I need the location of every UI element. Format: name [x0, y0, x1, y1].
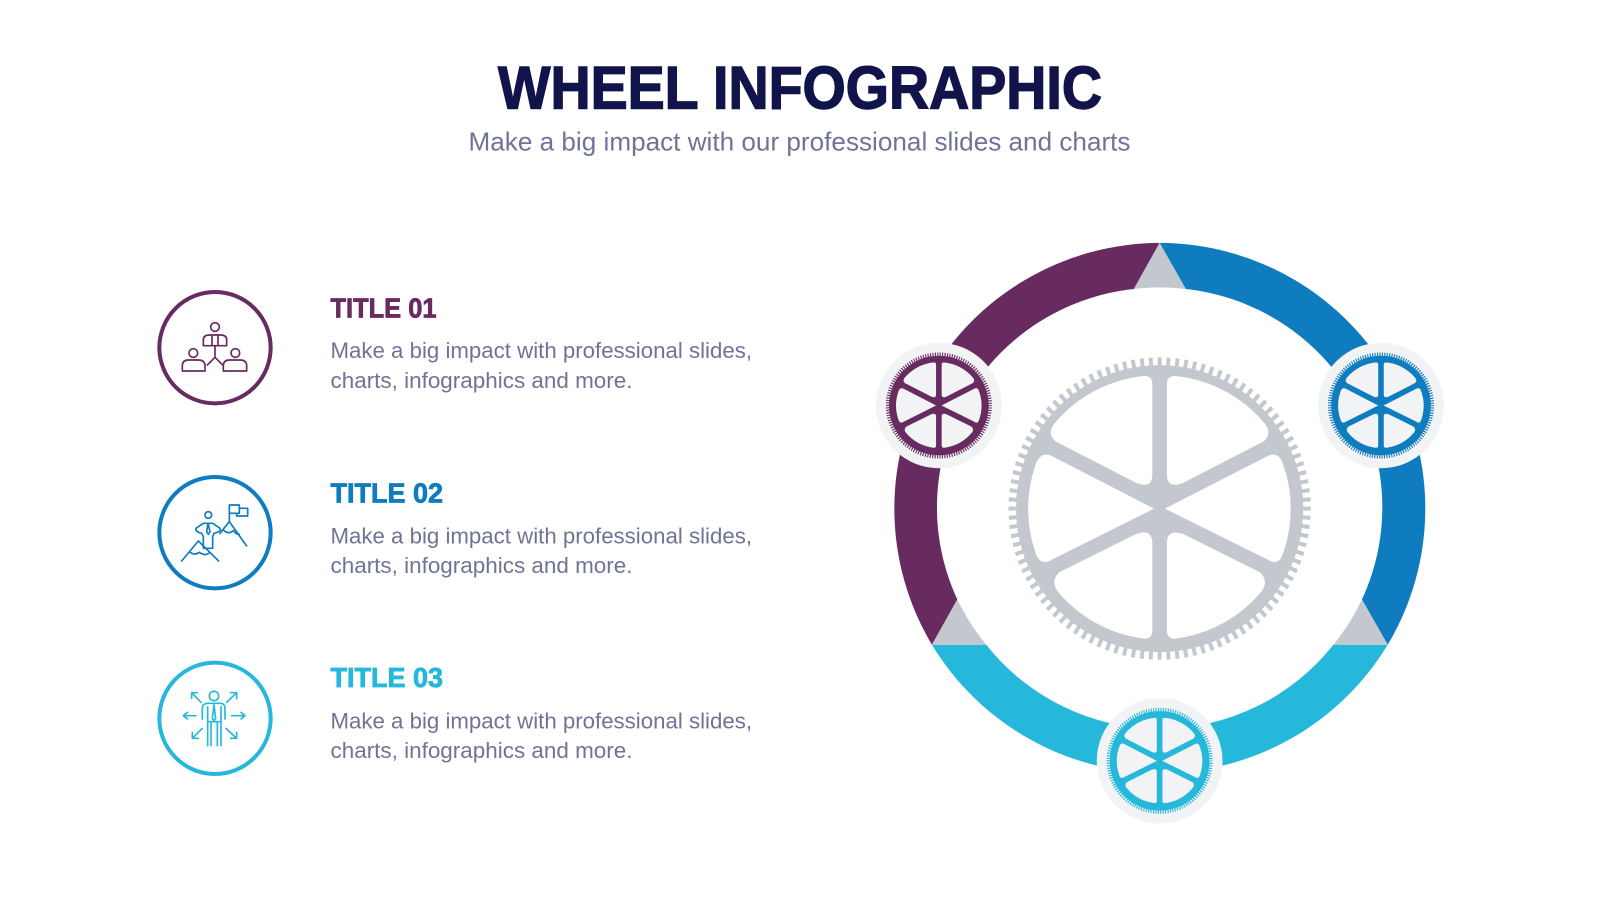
- ring segment: cyan: [932, 645, 1388, 773]
- title: WHEEL INFOGRAPHIC: [498, 54, 1102, 122]
- divider triangle: left: [932, 599, 986, 645]
- badge: blue gear: [1318, 343, 1444, 468]
- divider triangle: right: [1333, 599, 1388, 645]
- text block: description 02: charts, infographics and more.: [330, 553, 632, 578]
- heading: title 02: TITLE 02: [330, 478, 443, 508]
- panel: item 02: [159, 477, 752, 588]
- ring segment: purple: [894, 243, 1160, 645]
- icon: climber with flag: [159, 477, 271, 588]
- heading: title 03: TITLE 03: [330, 662, 443, 693]
- text block: description 02: Make a big impact with professional slides,: [330, 524, 752, 548]
- text block: description 03: Make a big impact with professional slides,: [330, 708, 752, 734]
- text block: description 01: Make a big impact with professional slides,: [330, 338, 752, 363]
- divider triangle: top: [1134, 243, 1186, 289]
- icon: team hierarchy: [159, 292, 271, 403]
- ring segment: blue: [1160, 243, 1425, 645]
- panel: item 01: [159, 292, 752, 403]
- icon: person with arrows: [159, 663, 271, 774]
- panel: item 03: [159, 662, 752, 774]
- text block: description 01: charts, infographics and more.: [330, 368, 632, 393]
- badge: purple gear: [876, 343, 1002, 468]
- text block: description 03: charts, infographics and more.: [330, 738, 632, 763]
- badge: cyan gear: [1097, 698, 1222, 824]
- gear: central grey: [1013, 362, 1306, 655]
- text block: description 02: [330, 524, 752, 578]
- heading: title 01: TITLE 01: [330, 292, 436, 324]
- subtitle: Make a big impact with our professional slides and charts: [468, 126, 1130, 156]
- text block: description 01: [330, 338, 752, 393]
- text block: description 03: [330, 708, 752, 763]
- chart: wheel diagram: [876, 243, 1444, 824]
